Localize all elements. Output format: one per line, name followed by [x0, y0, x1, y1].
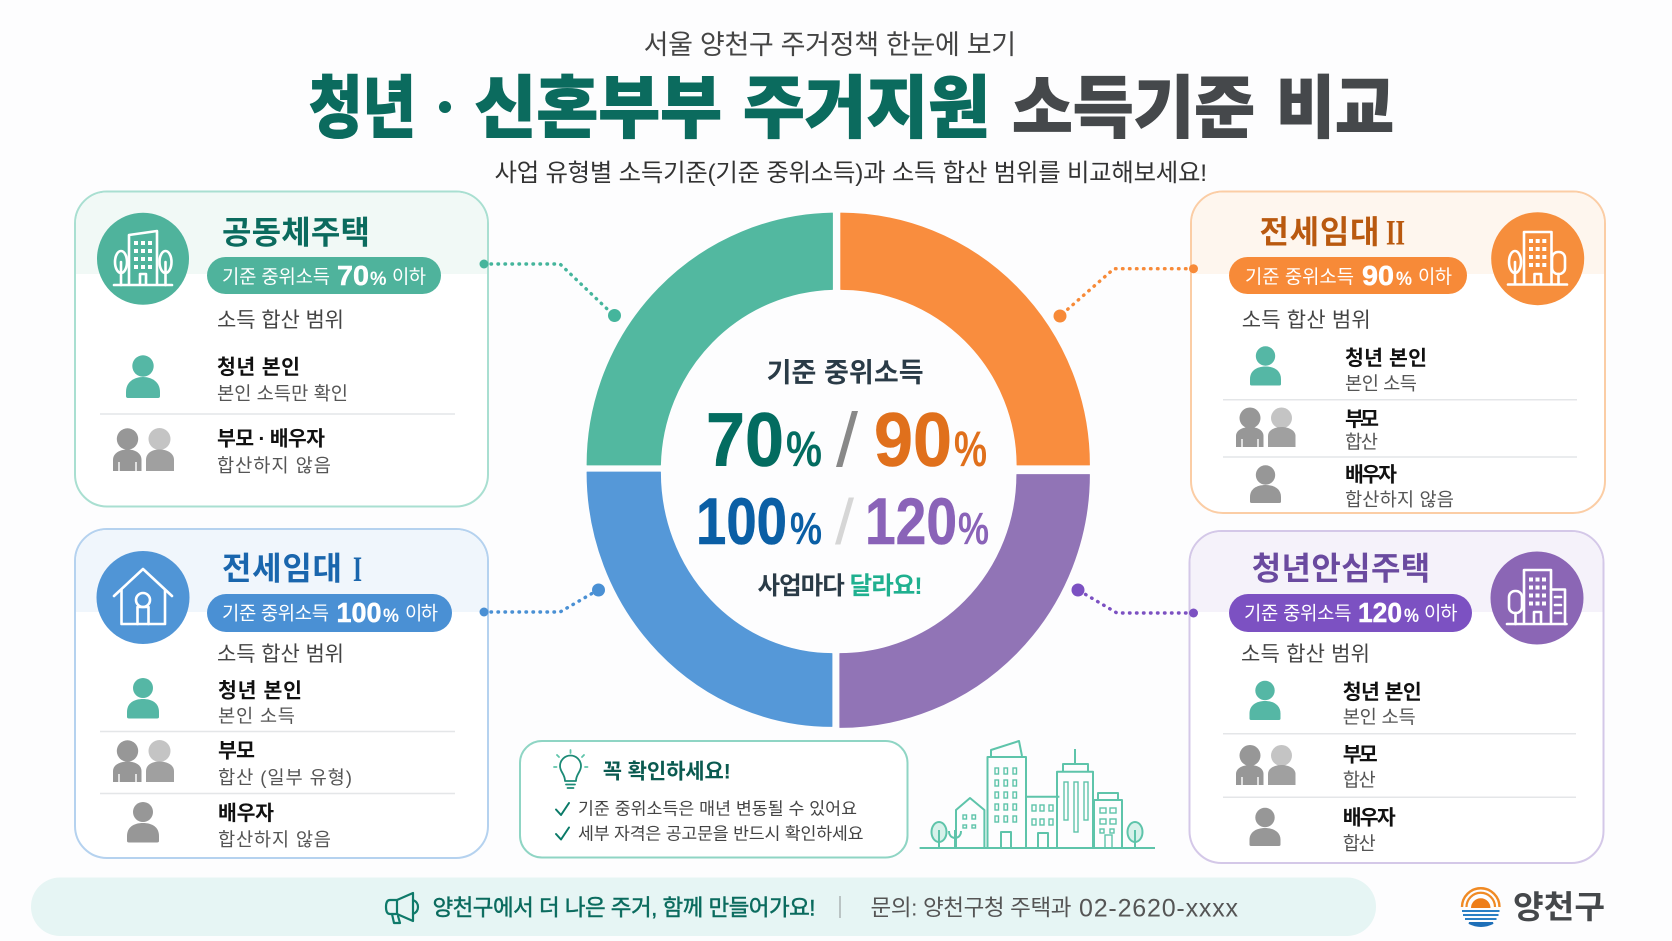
donut centre text: 90	[874, 398, 952, 483]
donut centre text: 70	[706, 398, 784, 483]
donut centre text: %	[954, 421, 987, 477]
row: 청년 본인	[1343, 681, 1422, 728]
badge: 120%: 이하	[1424, 602, 1458, 624]
icon: building with trees	[1491, 212, 1584, 305]
donut chart	[587, 213, 1090, 728]
badge: 100%: 100	[336, 597, 382, 628]
row: 청년 본인: 본인 소득	[218, 706, 295, 726]
donut centre text: %	[786, 421, 822, 477]
badge: 70%: 70	[337, 260, 369, 291]
icon: light bulb	[554, 750, 588, 788]
badge: 70%: 이하	[392, 266, 426, 287]
title: 소득기준	[1012, 71, 1255, 147]
icon: person gray	[1250, 465, 1281, 503]
panel: 청년안심주택	[1190, 531, 1604, 863]
badge: 100%: 기준 중위소득	[222, 602, 329, 624]
title: 신혼부부	[474, 71, 722, 147]
icon: apartment with trees	[97, 213, 189, 305]
connector: 전세임대 II	[1054, 264, 1198, 322]
subtitle: 사업 유형별 소득기준(기준 중위소득)과 소득 합산 범위를 비교해보세요!	[494, 160, 1207, 187]
callout heading: 꼭 확인하세요!	[603, 760, 731, 784]
donut centre text: /	[836, 398, 859, 483]
row: 배우자: 합산하지 않음	[1345, 489, 1454, 510]
connector: 청년안심주택	[1072, 584, 1198, 618]
footer banner	[31, 878, 1376, 936]
illustration: city skyline	[920, 741, 1155, 848]
row: 부모·배우자: 합산하지 않음	[217, 455, 331, 476]
row: 청년 본인: 본인 소득	[1345, 373, 1417, 394]
badge: 120%: %	[1404, 606, 1419, 627]
row: 배우자: 배우자	[1343, 806, 1396, 830]
badge: 120%: 기준 중위소득	[1244, 602, 1352, 624]
badge: 70%	[207, 257, 441, 294]
title: 비교	[1276, 71, 1394, 147]
row: 청년 본인: 본인 소득만 확인	[217, 383, 348, 404]
donut centre text: 사업마다 달라요!	[758, 572, 922, 600]
logo: 양천구	[1462, 888, 1605, 926]
icon: two people gray	[1236, 745, 1296, 785]
badge: 90%: 이하	[1418, 266, 1452, 287]
card title: II	[1386, 212, 1405, 252]
row: 배우자	[1343, 806, 1396, 854]
icon: house	[96, 551, 190, 644]
card title: 공동체주택	[222, 214, 370, 250]
badge: 100%: %	[383, 606, 399, 627]
donut centre text: 120	[865, 484, 957, 558]
badge: 90%	[1229, 257, 1467, 294]
footer contact: 02-2620-xxxx	[1079, 894, 1238, 922]
badge: 120%: 120	[1358, 597, 1402, 628]
label: income range: 소득 합산 범위	[217, 643, 344, 666]
label: income range: 소득 합산 범위	[1241, 643, 1370, 666]
icon: person teal	[127, 678, 159, 718]
icon: person gray	[127, 802, 159, 842]
donut centre text	[696, 358, 989, 600]
row: 청년 본인	[1345, 347, 1427, 394]
connector: 공동체주택	[480, 260, 621, 322]
badge: 90%: %	[1396, 269, 1412, 290]
card title: 전세임대	[222, 550, 342, 586]
row: 배우자	[1345, 464, 1454, 510]
icon: megaphone	[386, 893, 418, 923]
row: 청년 본인: 본인 소득	[1343, 706, 1416, 728]
panel: 전세임대 II	[1191, 192, 1605, 513]
icon: person gray	[1250, 808, 1280, 846]
row: 부모: 합산 (일부 유형)	[218, 767, 352, 788]
icon: person teal	[1250, 681, 1280, 720]
panel: 전세임대 I	[75, 529, 488, 858]
check item 2: 세부 자격은 공고문을 반드시 확인하세요	[578, 824, 864, 844]
label: income range: 소득 합산 범위	[1242, 309, 1371, 332]
badge: 70%: %	[370, 269, 387, 290]
logo wordmark: 양천구	[1513, 889, 1605, 925]
callout: 꼭 확인하세요	[520, 741, 908, 858]
header eyebrow: 서울 양천구 주거정책 한눈에 보기	[644, 30, 1016, 60]
row: 청년 본인: 청년 본인	[1343, 681, 1422, 704]
card title: I	[353, 549, 362, 589]
donut centre text: /	[835, 486, 854, 558]
badge: 100%: 이하	[405, 602, 438, 624]
icon: apartment building	[1490, 552, 1584, 644]
card title: 청년안심주택	[1252, 550, 1430, 586]
footer slogan: 양천구에서 더 나은 주거, 함께 만들어가요!	[432, 896, 816, 921]
row: 청년 본인: 청년 본인	[1345, 347, 1427, 370]
title	[309, 71, 1394, 147]
title: 청년	[309, 71, 416, 147]
badge: 90%: 90	[1362, 260, 1394, 291]
connector: 전세임대 I	[480, 584, 605, 616]
title: 주거지원	[743, 71, 990, 147]
donut centre text: %	[958, 503, 989, 554]
icon: two people gray	[113, 428, 174, 471]
row: 배우자: 배우자	[1345, 464, 1397, 486]
icon: person teal	[126, 355, 160, 398]
row: 배우자: 합산	[1343, 833, 1376, 854]
row: 부모: 합산	[1345, 432, 1378, 452]
panel: 공동체주택	[75, 192, 488, 506]
icon: person teal	[1250, 346, 1281, 386]
icon: two people gray	[1236, 408, 1296, 447]
row: 부모	[1345, 408, 1379, 452]
badge: 70%: 기준 중위소득	[222, 266, 330, 287]
row: 부모: 합산	[1343, 770, 1376, 790]
row: 배우자: 배우자	[218, 802, 274, 825]
icon: two people gray	[113, 740, 174, 782]
card title: 전세임대	[1260, 214, 1380, 250]
row: 부모·배우자	[217, 428, 331, 476]
row: 청년 본인: 청년 본인	[217, 356, 300, 379]
row: 부모	[218, 740, 352, 788]
footer contact: 문의: 양천구청 주택과	[870, 896, 1072, 921]
badge: 120%	[1229, 594, 1472, 632]
row: 부모: 부모	[218, 740, 255, 762]
badge: 90%: 기준 중위소득	[1245, 266, 1354, 287]
row: 청년 본인	[218, 680, 302, 726]
donut centre text: 기준 중위소득	[767, 358, 924, 388]
donut centre text: %	[790, 503, 822, 554]
row: 배우자: 합산하지 않음	[218, 829, 331, 850]
donut centre text: 100	[696, 484, 787, 558]
badge: 100%	[207, 594, 452, 632]
row: 청년 본인	[217, 356, 348, 404]
footer contact	[870, 894, 1238, 922]
row: 부모	[1343, 744, 1378, 790]
check item 1: 기준 중위소득은 매년 변동될 수 있어요	[578, 799, 857, 819]
row: 부모: 부모	[1343, 744, 1378, 766]
logo mark	[1462, 888, 1500, 926]
row: 배우자	[218, 802, 331, 850]
row: 부모: 부모	[1345, 408, 1379, 431]
label: income range: 소득 합산 범위	[217, 309, 344, 332]
row: 청년 본인: 청년 본인	[218, 680, 302, 702]
row: 부모·배우자: 부모 · 배우자	[217, 428, 325, 450]
